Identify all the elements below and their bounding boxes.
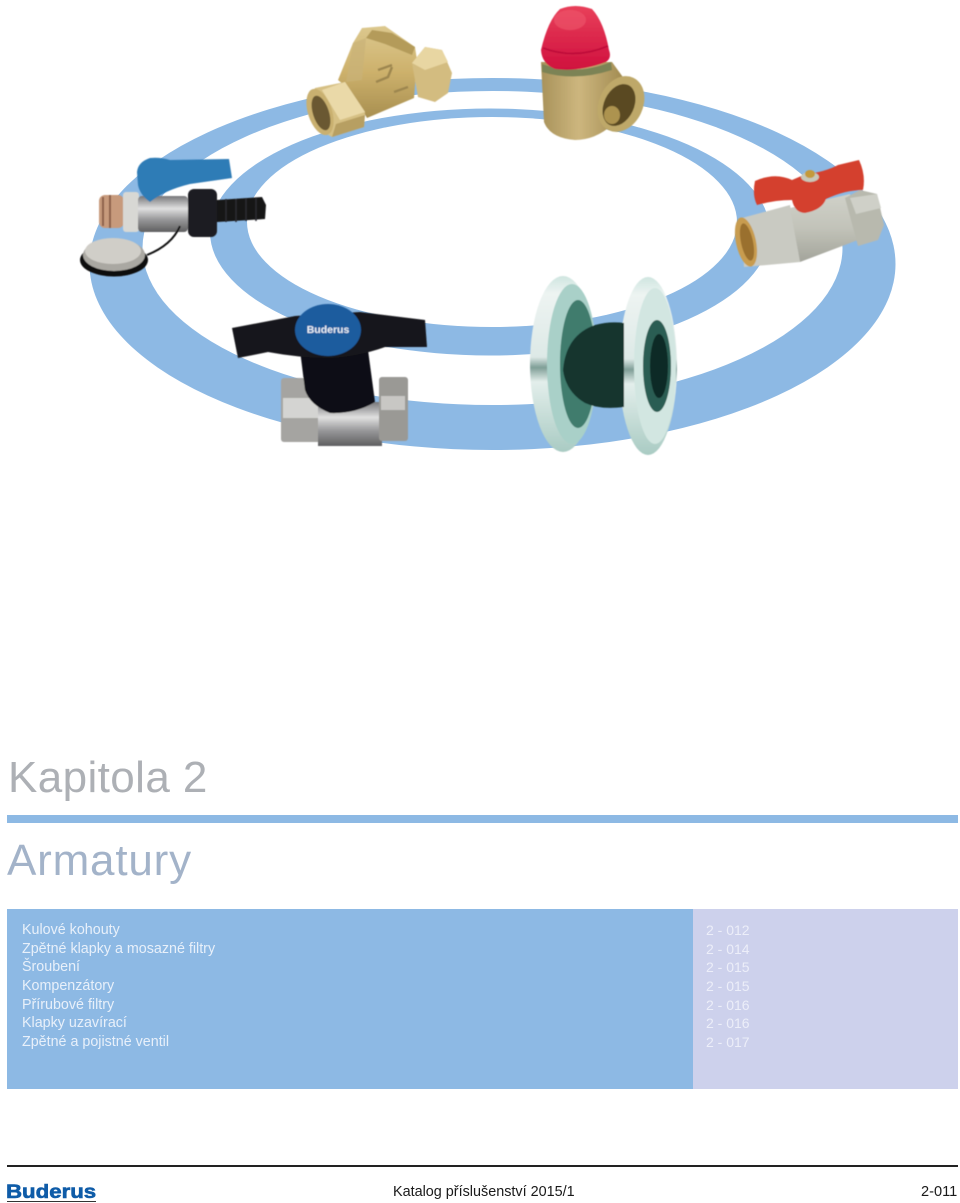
list of topics: Zpětné klapky a mosazné filtry — [22, 941, 215, 957]
list of page references: 2 - 015 — [706, 978, 750, 994]
logo: Buderus: Buderus — [6, 1181, 96, 1203]
icon: ball valve with blue handle, hose tail and cap — [80, 158, 266, 276]
list of topics — [22, 922, 216, 1050]
list of page references: 2 - 014 — [706, 941, 750, 957]
list of page references — [706, 922, 750, 1050]
logo on handle: Buderus — [307, 324, 349, 336]
list of topics: Klapky uzavírací — [22, 1015, 127, 1031]
list of topics: Kulové kohouty — [22, 922, 120, 938]
illustration: product ring with valves — [79, 5, 896, 456]
icon: ball valve with red butterfly handle — [731, 160, 884, 269]
list of topics: Zpětné a pojistné ventil — [22, 1034, 169, 1050]
list of page references: 2 - 016 — [706, 997, 750, 1013]
list of topics: Kompenzátory — [22, 978, 114, 994]
icon: safety valve with red cap — [541, 6, 653, 140]
panel: contents list — [7, 909, 693, 1089]
list of page references: 2 - 012 — [706, 922, 750, 938]
list of page references: 2 - 015 — [706, 959, 750, 975]
heading: chapter: Kapitola 2 — [8, 753, 208, 802]
footer rule — [7, 1165, 958, 1167]
icon: black handled Buderus ball valve — [232, 304, 427, 446]
divider bar — [7, 815, 958, 823]
footer: catalogue title: Katalog příslušenství 2015/1 — [393, 1184, 575, 1200]
list of page references: 2 - 017 — [706, 1034, 750, 1050]
icon: flanged rubber compensator — [530, 276, 677, 455]
heading: section: Armatury — [7, 836, 192, 885]
list of topics: Šroubení — [22, 959, 80, 975]
panel: page numbers — [693, 909, 958, 1089]
blue double ring — [90, 78, 896, 450]
icon: brass Y strainer — [301, 26, 452, 139]
list of topics: Přírubové filtry — [22, 997, 114, 1013]
footer: page number: 2-011 — [921, 1184, 957, 1200]
list of page references: 2 - 016 — [706, 1015, 750, 1031]
